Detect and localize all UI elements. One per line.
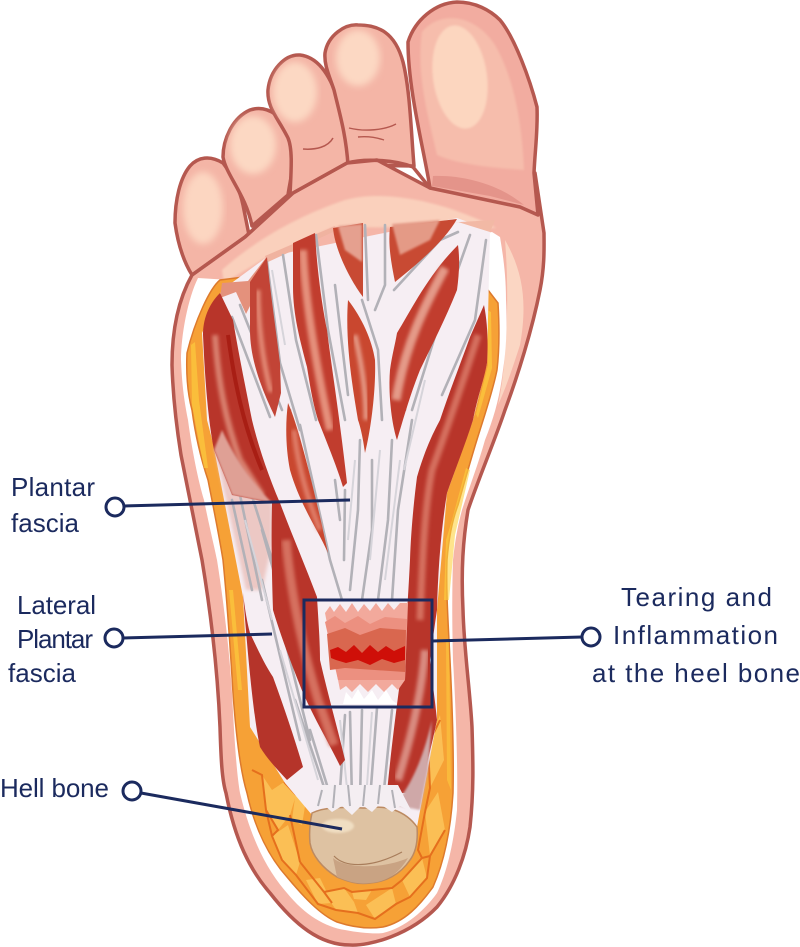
toe: little bbox=[175, 158, 250, 275]
highlight box: tearing and inflammation bbox=[304, 600, 432, 707]
label: plantar fascia: Plantar bbox=[11, 472, 95, 502]
pink tissue under left muscle bbox=[214, 445, 272, 590]
muscle: top centre bbox=[333, 223, 363, 297]
tissue cap: upper muscle ends bbox=[220, 220, 495, 314]
label: tearing and inflammation: Tearing and bbox=[621, 582, 772, 612]
toe: fourth bbox=[223, 109, 294, 226]
ball of foot pale band bbox=[222, 196, 496, 283]
muscle: second narrow bbox=[250, 257, 281, 417]
label: plantar fascia: fascia bbox=[11, 508, 80, 538]
label: tearing and inflammation: at the heel bone bbox=[592, 658, 800, 688]
ball of foot crease bbox=[192, 160, 430, 275]
label: heel bone: Hell bone bbox=[0, 773, 109, 803]
muscle: far left bbox=[203, 293, 345, 766]
label: lateral plantar fascia: Plantar bbox=[17, 624, 93, 654]
toe: third bbox=[268, 55, 350, 195]
label: lateral plantar fascia: Lateral bbox=[17, 590, 96, 620]
fascia fray over bone bbox=[315, 785, 412, 815]
label: lateral plantar fascia: fascia bbox=[8, 658, 77, 688]
label: tearing and inflammation: Inflammation bbox=[613, 620, 778, 650]
muscle: leaf centre left bbox=[286, 403, 328, 553]
right side skin highlight bbox=[498, 240, 524, 405]
label: lateral plantar fascia bbox=[8, 590, 272, 688]
inflammation zone bbox=[325, 603, 408, 704]
tendon grey fibres bbox=[232, 225, 486, 800]
muscle: centre leaf bbox=[347, 300, 375, 453]
muscle: third bbox=[293, 233, 347, 487]
fat layer bbox=[187, 270, 499, 928]
toe: second bbox=[325, 25, 414, 166]
muscle: lower left bbox=[243, 593, 303, 780]
toe: big bbox=[408, 2, 538, 215]
muscle: right leaf bbox=[389, 245, 459, 440]
sole skin bbox=[172, 160, 544, 945]
label: tearing and inflammation bbox=[432, 582, 800, 688]
fibres over fray bbox=[318, 785, 395, 808]
label: plantar fascia bbox=[11, 472, 350, 538]
muscle: top right bbox=[389, 219, 457, 282]
fat cells bbox=[191, 310, 492, 919]
heel bone bbox=[310, 807, 417, 883]
white gap bbox=[181, 232, 507, 933]
muscle: far right bbox=[387, 305, 488, 810]
white tendon sheet bbox=[202, 218, 490, 827]
foot illustration bbox=[172, 2, 544, 945]
label: heel bone bbox=[0, 773, 342, 829]
